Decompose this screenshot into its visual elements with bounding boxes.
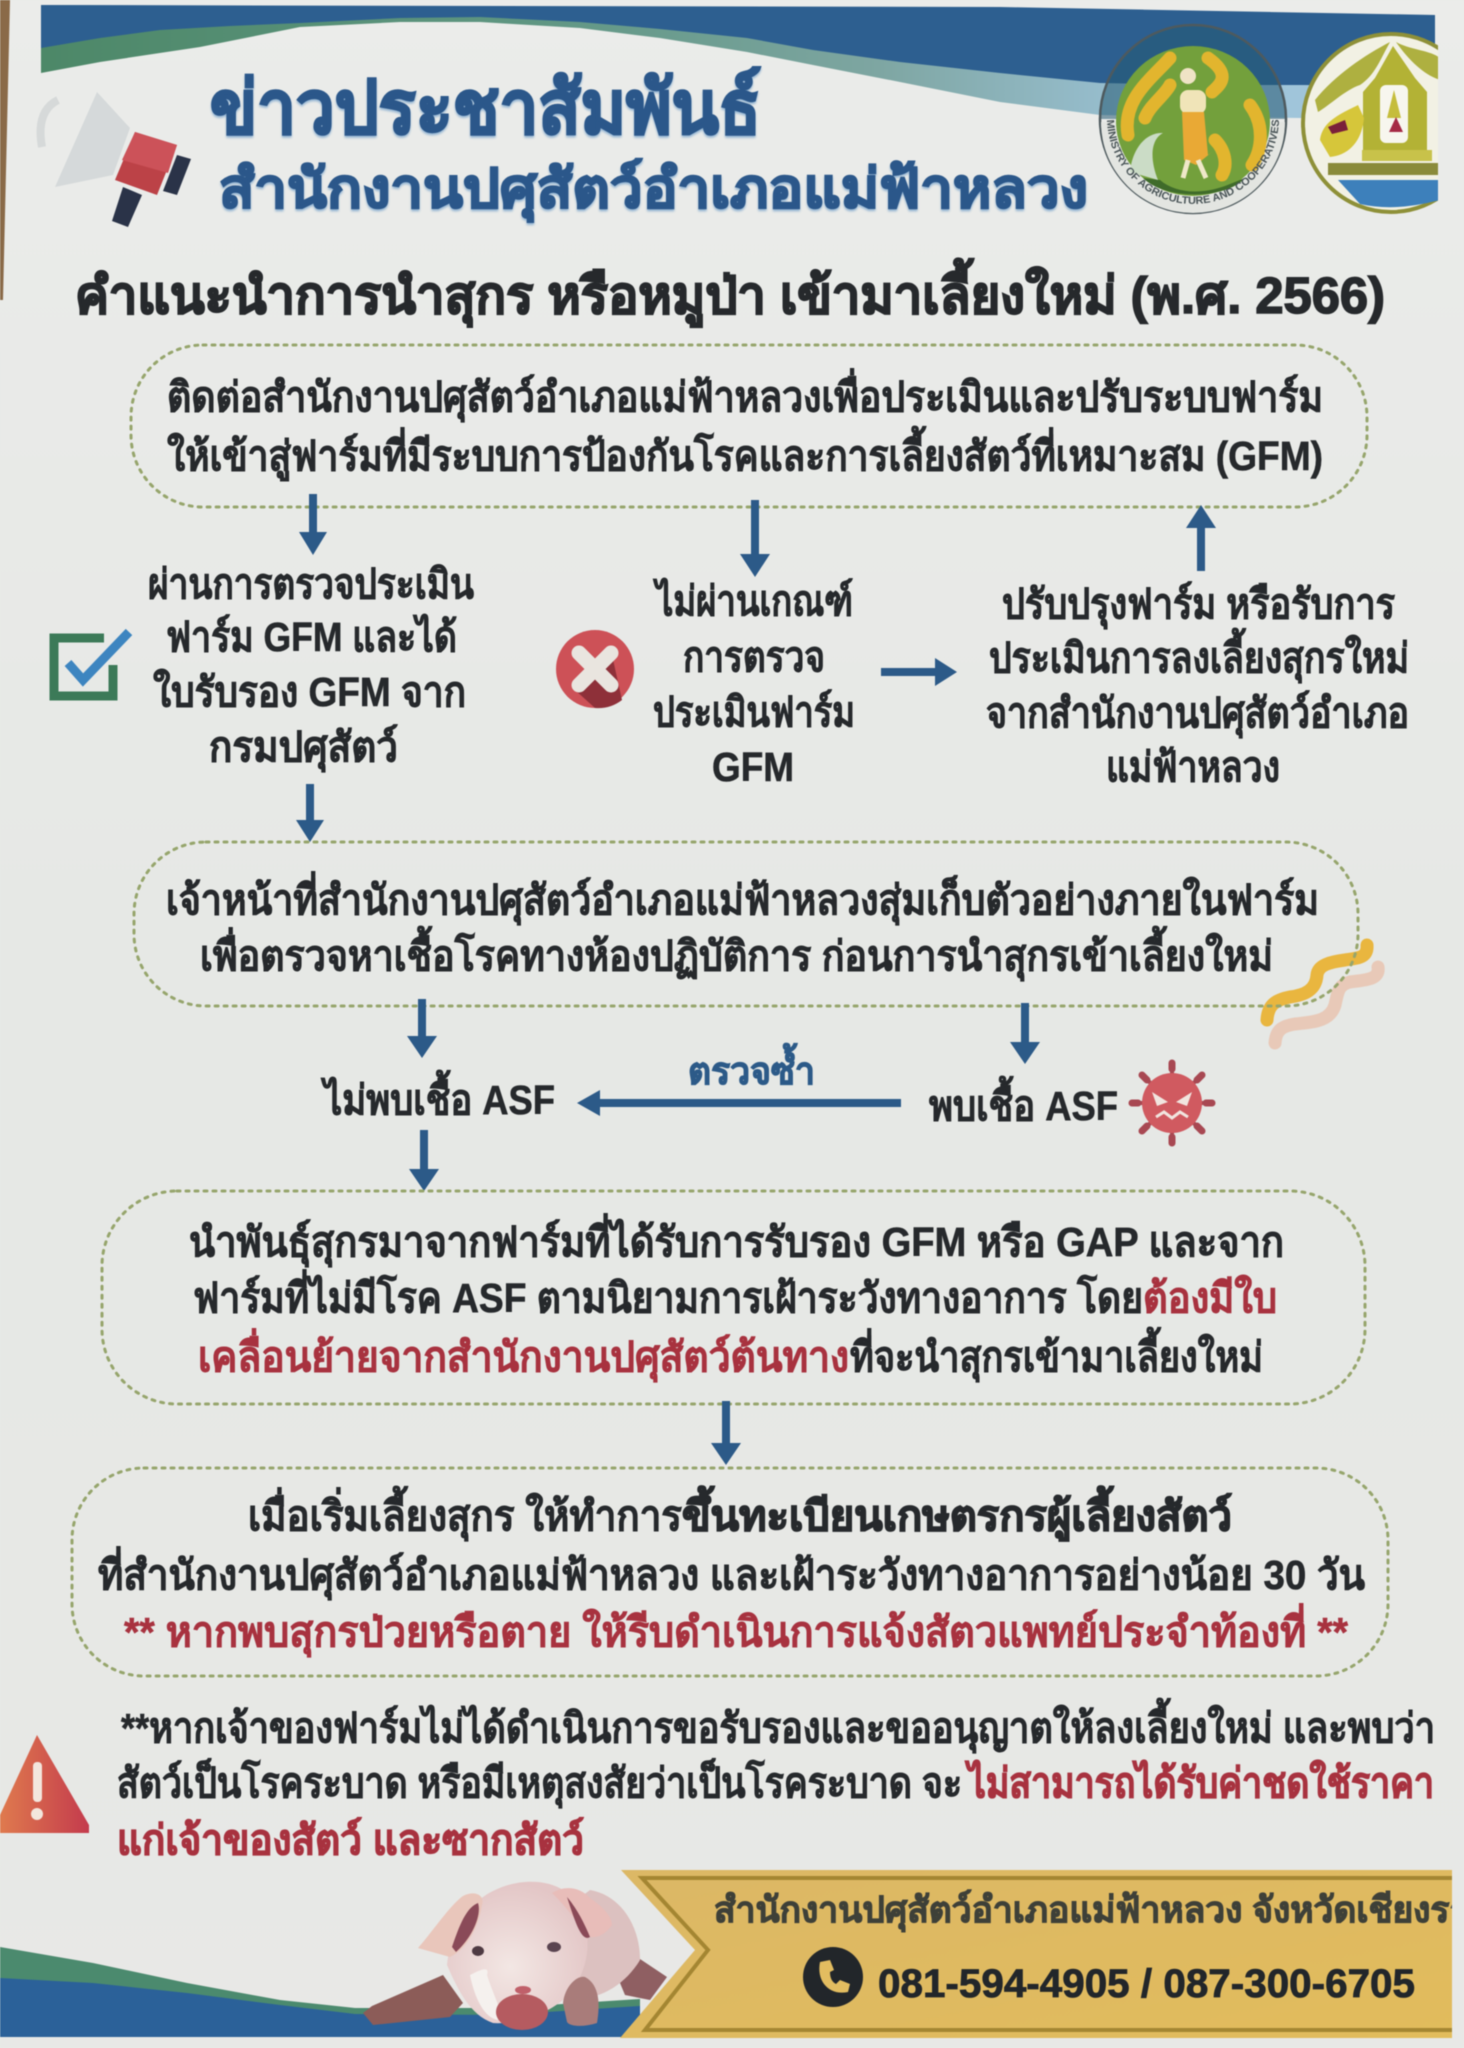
panel: contact office: ให้เข้าสู่ฟาร์มที่มีระบบการป้องกันโรคและการเลี้ยงสัตว์ที่เหมาะสม (GFM) — [167, 426, 1323, 482]
piglet ear right — [552, 1888, 612, 1937]
text: improve farm: ประเมินการลงเลี้ยงสุกรใหม่ — [989, 628, 1409, 684]
text: improve farm: ปรับปรุงฟาร์ม หรือรับการ — [1002, 581, 1395, 630]
icon: green check box — [54, 632, 129, 696]
seal: provincial emblem — [1300, 32, 1439, 215]
arrow: pass to sampling — [296, 784, 324, 842]
panel: register farmer — [72, 1468, 1388, 1676]
seal: ministry of agriculture: MINISTRY OF AGRICULTURE AND COOPERATIVES — [1106, 119, 1280, 205]
image: piglet — [363, 1882, 667, 2030]
piglet snout — [496, 1994, 548, 2030]
arrow: down to sourcing — [409, 1130, 439, 1191]
panel: source piglets: ที่จะนำสุกรเข้ามาเลี้ยงใหม่ — [850, 1327, 1263, 1383]
text: pass GFM: ผ่านการตรวจประเมิน — [148, 561, 474, 607]
arrow: down to no ASF — [407, 999, 437, 1058]
text: improve farm: แม่ฟ้าหลวง — [1106, 744, 1280, 790]
subtitle: district livestock office: สำนักงานปศุสัตว์อำเภอแม่ฟ้าหลวง — [219, 158, 1088, 223]
panel: lab sampling: เจ้าหน้าที่สำนักงานปศุสัตว์อำเภอแม่ฟ้าหลวงสุ่มเก็บตัวอย่างภายในฟาร์ม — [166, 871, 1319, 926]
arrow: down to fail — [740, 500, 770, 577]
panel: lab sampling: เพื่อตรวจหาเชื้อโรคทางห้องปฏิบัติการ ก่อนการนำสุกรเข้าเลี้ยงใหม่ — [200, 926, 1273, 982]
text: pass GFM: ฟาร์ม GFM และได้ — [166, 613, 457, 660]
panel: source piglets: เคลื่อนย้ายจากสำนักงานปศุสัตว์ต้นทาง — [198, 1328, 849, 1383]
text: ASF not found: ไม่พบเชื้อ ASF — [320, 1070, 555, 1123]
piglet body — [550, 1890, 640, 2000]
panel: lab sampling — [134, 842, 1358, 1006]
panel: contact office — [131, 345, 1367, 507]
header wave — [41, 5, 1435, 120]
arrow: down to register — [711, 1401, 741, 1465]
piglet cheek — [470, 1969, 500, 2020]
arrow: down to pass — [299, 494, 327, 555]
title: press release: ข่าวประชาสัมพันธ์ — [210, 66, 761, 149]
panel: contact office: ติดต่อสำนักงานปศุสัตว์อำเภอแม่ฟ้าหลวงเพื่อประเมินและปรับระบบฟาร์ม — [167, 368, 1323, 423]
text: fail GFM: GFM — [712, 744, 794, 790]
arrow: retest — [577, 1090, 901, 1116]
text: fail GFM: ประเมินฟาร์ม — [653, 689, 855, 735]
text: fail GFM: ไม่ผ่านเกณฑ์ — [653, 577, 853, 624]
icon: megaphone — [41, 92, 191, 227]
text: warning note — [117, 1698, 1435, 1863]
text: retest label: ตรวจซ้ำ — [688, 1043, 815, 1093]
panel: source piglets — [102, 1191, 1365, 1404]
text: fail GFM — [653, 577, 855, 790]
text: fail GFM: การตรวจ — [683, 634, 825, 680]
icon: red x circle — [556, 630, 634, 708]
arrow: down to ASF found — [1010, 1003, 1040, 1064]
piglet left leg — [363, 1975, 463, 2025]
main heading: คำแนะนำการนำสุกร หรือหมูป่า เข้ามาเลี้ยงใหม่ (พ.ศ. 2566) — [75, 258, 1385, 328]
text: improve farm: จากสำนักงานปศุสัตว์อำเภอ — [986, 690, 1409, 739]
panel: register farmer: ที่สำนักงานปศุสัตว์อำเภอแม่ฟ้าหลวง และเฝ้าระวังทางอาการอย่างน้อย 30 วัน — [98, 1546, 1365, 1601]
piglet head — [447, 1882, 588, 2023]
panel: register farmer: ขึ้นทะเบียนเกษตรกรผู้เลี้ยงสัตว์ — [682, 1486, 1232, 1542]
arrow: up to contact — [1186, 505, 1216, 571]
text: warning note: สัตว์เป็นโรคระบาด หรือมีเหตุสงสัยว่าเป็นโรคระบาด จะ — [117, 1758, 962, 1809]
piglet eyes — [472, 1946, 484, 1956]
piglet front leg — [563, 1977, 599, 2026]
text: warning note: แก่เจ้าของสัตว์ และซากสัตว์ — [117, 1817, 584, 1863]
panel: source piglets: ฟาร์มที่ไม่มีโรค ASF ตามนิยามการเฝ้าระวังทางอาการ โดย — [193, 1269, 1143, 1321]
text: pass GFM — [148, 561, 474, 773]
panel: register farmer: เมื่อเริ่มเลี้ยงสุกร ให้ทำการ — [248, 1486, 682, 1542]
banner: contact — [620, 1870, 1464, 2038]
text: pass GFM: กรมปศุสัตว์ — [209, 724, 398, 773]
text: improve farm — [986, 581, 1409, 790]
banner: contact: 081-594-4905 / 087-300-6705 — [878, 1962, 1415, 2006]
piglet ear left — [418, 1893, 483, 1957]
panel: source piglets: ต้องมีใบ — [1143, 1274, 1277, 1321]
text: ASF found: พบเชื้อ ASF — [929, 1076, 1118, 1129]
text: pass GFM: ใบรับรอง GFM จาก — [153, 668, 466, 715]
arrow: fail to improve — [881, 658, 957, 686]
panel: register farmer: ** หากพบสุกรป่วยหรือตาย ให้รีบดำเนินการแจ้งสัตวแพทย์ประจำท้องที่ ** — [124, 1603, 1348, 1658]
seal: ministry of agriculture — [1098, 23, 1288, 215]
icon: worm squiggles — [1267, 945, 1378, 1043]
panel: source piglets: นำพันธุ์สุกรมาจากฟาร์มที่ได้รับการรับรอง GFM หรือ GAP และจาก — [189, 1213, 1284, 1268]
icon: virus — [1132, 1063, 1212, 1143]
footer wave — [0, 1947, 640, 2037]
icon: warning triangle — [0, 1735, 89, 1833]
piglet rear leg — [620, 1957, 667, 2000]
